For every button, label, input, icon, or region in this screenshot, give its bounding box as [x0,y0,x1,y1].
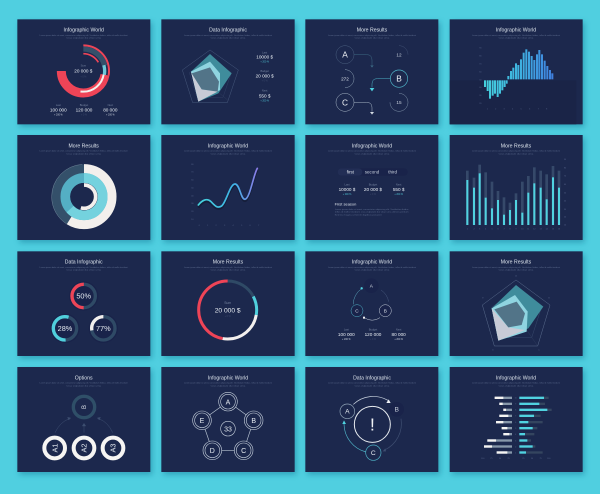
x axis: 16 [558,228,561,230]
stats column: + 200 % [260,62,269,64]
axis labels: A [515,274,517,277]
text block: Cras vulputate dui vitae urna [355,37,389,40]
panel: alert cycle slide [305,367,440,475]
left grey bars [484,397,512,454]
panel: percent rings slide [17,251,152,359]
y axis: 90 [479,47,482,49]
row labels: 6 [515,422,517,424]
node A: A [342,50,348,60]
text block: Lorem ipsum dolor sit amet, consectetur adipiscing elit. Vestibulum finibus, tellus id mollis tincidunt [328,150,417,153]
heading: Data Infographic [209,28,247,34]
axis labels [482,274,550,351]
row labels: 9 [515,404,517,406]
y axis: 20 [479,103,482,105]
text block: Lorem ipsum dolor sit amet, consectetur adipiscing elit. Vestibulum finibus, tellus id mollis tincidunt [472,382,561,385]
text block: Cras vulputate dui vitae urna [66,37,101,40]
x axis: 50 [531,458,534,460]
section text: Lorem ipsum dolor sit amet, consectetur adipiscing elit. Vestibulum finibus [335,208,409,211]
tabs: first [347,170,355,175]
stats row: + 200 % [342,339,351,341]
panel: wave bar chart slide [450,19,585,127]
y axis: 50 [564,192,567,194]
stats row: Budget [80,103,88,107]
chart: segmented ring [199,281,257,339]
y axis [191,164,194,221]
x axis: 3 [224,225,226,227]
x axis: 13 [540,228,543,230]
panel: tall bar chart slide [450,135,585,243]
x axis: 11 [527,228,529,230]
centre value [215,301,241,318]
stats column: 550 $ [259,93,271,98]
x axis: 25 [508,458,511,460]
x axis: 1 [207,225,208,227]
text block: Lorem ipsum dolor sit amet, consectetur adipiscing elit. Vestibulum finibus, tellus id mollis tincidunt [472,34,561,37]
x axis: 7 [503,228,505,230]
stats row: Last [344,182,350,186]
x axis: 8 [546,109,548,111]
node A: A [370,283,374,288]
stats row: 120 000 [76,108,93,113]
text block: Cras vulputate dui vitae urna [211,152,245,155]
heading: Options [75,376,93,382]
centre value [74,64,93,78]
row labels: 5 [515,428,517,430]
x axis: 15 [552,228,555,230]
x axis: 75 [540,458,543,460]
text block [472,150,561,155]
stats column: Budget [260,69,269,73]
text block: Cras vulputate dui vitae urna [211,384,245,387]
y axis: 50 [191,188,194,190]
stats row: + 200 % [343,194,351,196]
text block: Lorem ipsum dolor sit amet, consectetur adipiscing elit. Vestibulum finibus, tellus id mollis tincidunt [184,150,273,153]
x axis: 6 [529,109,531,111]
panel: options slide [17,367,152,475]
text block: Cras vulputate dui vitae urna [499,384,533,387]
gauge 15: 15 [396,100,402,105]
x axis: 4 [232,225,234,227]
node C: C [371,450,376,457]
node B: B [82,405,88,409]
y axis: 50 [479,79,482,81]
stats row: 120 000 [365,332,382,337]
x axis: 2 [215,225,217,227]
stats column [256,50,274,102]
text block [184,150,273,155]
stats row: Budget [369,182,377,186]
stats row: Budget [369,328,377,332]
text block: Lorem ipsum dolor sit amet, consectetur adipiscing elit. Vestibulum finibus, tellus id mollis tincidunt [40,150,128,153]
x axis: 10 [521,228,524,230]
stats row: + 200 % [106,115,115,117]
node B: B [394,407,399,414]
y axis: 10 [564,224,567,226]
y axis: 40 [564,201,567,203]
text block: Lorem ipsum dolor sit amet, consectetur adipiscing elit. Vestibulum finibus, tellus id mollis tincidunt [184,34,273,37]
y axis: 80 [191,164,194,166]
lower band [450,80,576,124]
tabs [338,168,408,176]
heading: More Results [68,144,99,150]
centre value: + 0 % [80,76,86,78]
node C: C [355,308,359,313]
heading: Infographic World [208,376,248,382]
text block: Lorem ipsum dolor sit amet, consectetur adipiscing elit. Vestibulum finibus, tellus id mollis tincidunt [40,34,128,37]
stats row: 20 000 $ [364,187,382,192]
chart: line [198,168,257,209]
text block [184,34,273,40]
x axis: 25 [522,458,525,460]
ring 77%: 77% [96,324,111,333]
arrow C [354,102,374,115]
chart: dark bars [466,165,560,225]
node E: E [200,418,205,425]
heading: Infographic World [352,260,392,266]
x axis [481,458,551,460]
heading: Infographic World [208,144,248,150]
node B: B [396,74,402,84]
panel: donut chart slide [17,19,152,127]
heading: Infographic World [496,376,536,382]
row labels: 1 [515,452,516,454]
panel: tabs slide [305,135,440,243]
node B: B [251,418,256,425]
stats row: Next [396,182,402,186]
text block: Lorem ipsum dolor sit amet, consectetur adipiscing elit. Vestibulum finibus, tellus id mollis tincidunt [184,266,273,269]
centre value: 20 000 $ [215,307,241,314]
row labels: 8 [515,410,517,412]
centre value: + 0 % [225,316,231,318]
axis labels: E [482,297,484,299]
x axis: 100 [481,458,485,460]
y axis: 70 [479,63,482,65]
heading: Infographic World [496,28,536,34]
centre value: Sum [224,301,231,305]
node A: A [345,409,350,416]
x axis: 5 [491,228,493,230]
y axis: 30 [191,203,194,205]
stats column: + 0 % [262,81,268,83]
ring 28%: 28% [58,324,73,333]
chart: radar [482,280,550,346]
panel: big ring slide [161,251,297,359]
text block: Cras vulputate dui vitae urna [211,37,245,40]
section text: tellus id mollis tincidunt, cras vulputate dui vitae urna ultrices pretium [335,211,409,214]
text block: Lorem ipsum dolor sit amet, consectetur adipiscing elit. Vestibulum finibus, tellus id mollis tincidunt [472,150,561,153]
stats row: 80 000 [103,108,118,113]
y axis: 20 [191,211,194,213]
cycle arrows [342,396,401,452]
stats row: + 200 % [394,194,403,196]
stats row: Next [396,328,402,332]
y axis: 60 [479,71,482,73]
x axis: 7 [258,225,259,227]
text block: Cras vulputate dui vitae urna [66,152,101,155]
stats row: 10000 $ [339,187,356,192]
y axis: 70 [191,172,194,174]
heading: More Results [501,144,532,150]
centre value: 33 [224,426,232,433]
text block: Cras vulputate dui vitae urna [355,152,389,155]
row labels: 10 [515,398,518,400]
stats row: Last [56,103,61,107]
y axis: 20 [564,216,567,218]
section text: Sed eu magna at lorem dapibus posuere [335,213,382,216]
text block [328,382,417,387]
gauge 12: 12 [396,52,402,57]
right teal bars [519,397,547,454]
node B: B [384,308,387,313]
text block: Cras vulputate dui vitae urna [499,152,533,155]
text block [40,266,128,272]
x axis: 1 [487,109,488,111]
y axis: 40 [191,195,194,197]
text block: Cras vulputate dui vitae urna [211,269,245,272]
x axis: 5 [241,225,243,227]
gauge 272: 272 [341,76,349,81]
y axis: 80 [564,167,567,169]
panel: flow circles slide [305,19,440,127]
x axis: 2 [495,109,496,111]
x axis: 1 [467,228,468,230]
x axis: 5 [520,109,522,111]
x axis: 2 [473,228,475,230]
text block: Cras vulputate dui vitae urna [66,384,101,387]
x axis: 4 [485,228,487,230]
heading: More Results [213,260,244,266]
x axis: 9 [515,228,517,230]
axis labels: C [538,349,540,351]
row labels [515,398,518,454]
chart: layered donut [58,45,109,97]
heading: Data Infographic [353,376,391,382]
heading: More Results [501,260,532,266]
panel: large radar slide [450,251,585,359]
x axis: 14 [546,228,549,230]
stats row: 80 000 [392,332,406,337]
axis labels: B [548,297,550,299]
left white bars [484,397,509,454]
ring 50%: 50% [76,292,91,301]
x axis: 6 [497,228,499,230]
x axis: 75 [490,458,493,460]
x axis: 3 [479,228,481,230]
text block [184,382,273,387]
stats column: 20 000 $ [256,74,274,79]
tabs: second [365,170,380,175]
section heading: First season [335,201,356,206]
stats row: + 0 % [81,115,87,117]
y axis: 60 [564,184,567,186]
arrow B [370,79,390,91]
node A1: A1 [50,444,59,452]
stats row: + 0 % [370,194,376,196]
panel: radar slide [161,19,297,127]
y axis: 10 [191,219,194,221]
x axis: 8 [509,228,511,230]
text block: Lorem ipsum dolor sit amet, consectetur adipiscing elit. Vestibulum finibus, tellus id mollis tincidunt [328,382,417,385]
panel: pentagon network slide [161,367,297,475]
text block: Cras vulputate dui vitae urna [499,269,533,272]
heading: Data Infographic [65,260,103,266]
node C: C [241,448,246,455]
node A3: A3 [109,444,118,452]
axis labels: D [492,349,494,351]
text block [184,266,273,272]
chart: light bars [466,173,560,225]
row labels: 3 [515,440,517,442]
text block [472,34,561,40]
y axis: 80 [479,55,482,57]
node C: C [342,97,348,107]
text block [472,266,561,272]
node A2: A2 [80,444,89,452]
text block: Cras vulputate dui vitae urna [355,384,389,387]
text block [40,34,128,40]
x axis: 3 [503,109,505,111]
x axis: 6 [249,225,251,227]
text block [328,266,417,272]
panel: ring donut slide [17,135,152,243]
y axis: 60 [191,180,194,182]
y axis [479,47,482,105]
x axis: 7 [538,109,539,111]
text block [472,382,561,387]
heading: Infographic World [352,144,392,150]
stats row: Next [108,103,113,107]
y axis: 90 [564,159,567,161]
stats column: 10000 $ [256,55,273,60]
text block [40,382,128,387]
stats row: 550 $ [393,187,405,192]
x axis [487,109,548,111]
y axis [564,159,567,226]
text block: Lorem ipsum dolor sit amet, consectetur adipiscing elit. Vestibulum finibus, tellus id mollis tincidunt [328,266,417,269]
x axis: 100 [547,458,551,460]
right dark bars [519,397,552,454]
y axis: 30 [479,95,482,97]
connecting pentagon [202,402,254,450]
y axis: 30 [564,209,567,211]
node D: D [210,448,215,455]
arrows [55,417,113,433]
heading: Infographic World [64,28,104,34]
stats column: Next [262,89,268,93]
stats row: 100 000 [50,108,67,113]
text block [40,150,128,155]
text block: Lorem ipsum dolor sit amet, consectetur adipiscing elit. Vestibulum finibus, tellus id mollis tincidunt [472,266,561,269]
row labels: 7 [515,416,516,418]
section text [335,208,409,216]
text block: Lorem ipsum dolor sit amet, consectetur adipiscing elit. Vestibulum finibus, tellus id mollis tincidunt [40,266,128,269]
text block [328,150,417,155]
text block: Lorem ipsum dolor sit amet, consectetur adipiscing elit. Vestibulum finibus, tellus id mollis tincidunt [328,34,417,37]
row labels: 2 [515,446,516,448]
stats row: Last [344,328,349,332]
tabs: third [388,170,398,175]
x axis: 50 [499,458,502,460]
y axis: 40 [479,87,482,89]
heading: More Results [357,28,388,34]
chart: nested rings [52,164,116,229]
x axis: 12 [533,228,535,230]
stats row: + 200 % [54,115,63,117]
x axis: 4 [512,109,514,111]
arrow A [354,55,374,68]
chart: bars [484,49,553,99]
text block: Cras vulputate dui vitae urna [499,37,533,40]
stats row [50,103,118,117]
x axis: 0 [199,225,201,227]
cycle arcs [353,287,389,320]
panel: line chart slide [161,135,297,243]
stats row [338,328,406,341]
centre alert: ! [370,415,375,435]
panel: cycle slide [305,251,440,359]
stats row: 100 000 [338,332,355,337]
x axis [467,228,561,230]
stats row [339,182,405,196]
row labels: 4 [515,434,517,436]
centre value: 20 000 $ [74,69,93,74]
text block: Cras vulputate dui vitae urna [66,269,101,272]
centre value: Sum [81,64,87,68]
text block: Lorem ipsum dolor sit amet, consectetur adipiscing elit. Vestibulum finibus, tellus id mollis tincidunt [184,382,273,385]
x axis [199,225,259,227]
stats column: + 200 % [260,100,269,102]
stats column: Last [262,50,267,54]
y axis: 70 [564,176,567,178]
text block [328,34,417,40]
stats row: + 200 % [394,339,403,341]
stats row: + 0 % [370,339,376,341]
text block: Cras vulputate dui vitae urna [355,269,389,272]
node A: A [226,399,231,406]
chart: radar [182,50,238,103]
panel: butterfly bar chart slide [450,367,585,475]
text block: Lorem ipsum dolor sit amet, consectetur adipiscing elit. Vestibulum finibus, tellus id mollis tincidunt [40,382,128,385]
